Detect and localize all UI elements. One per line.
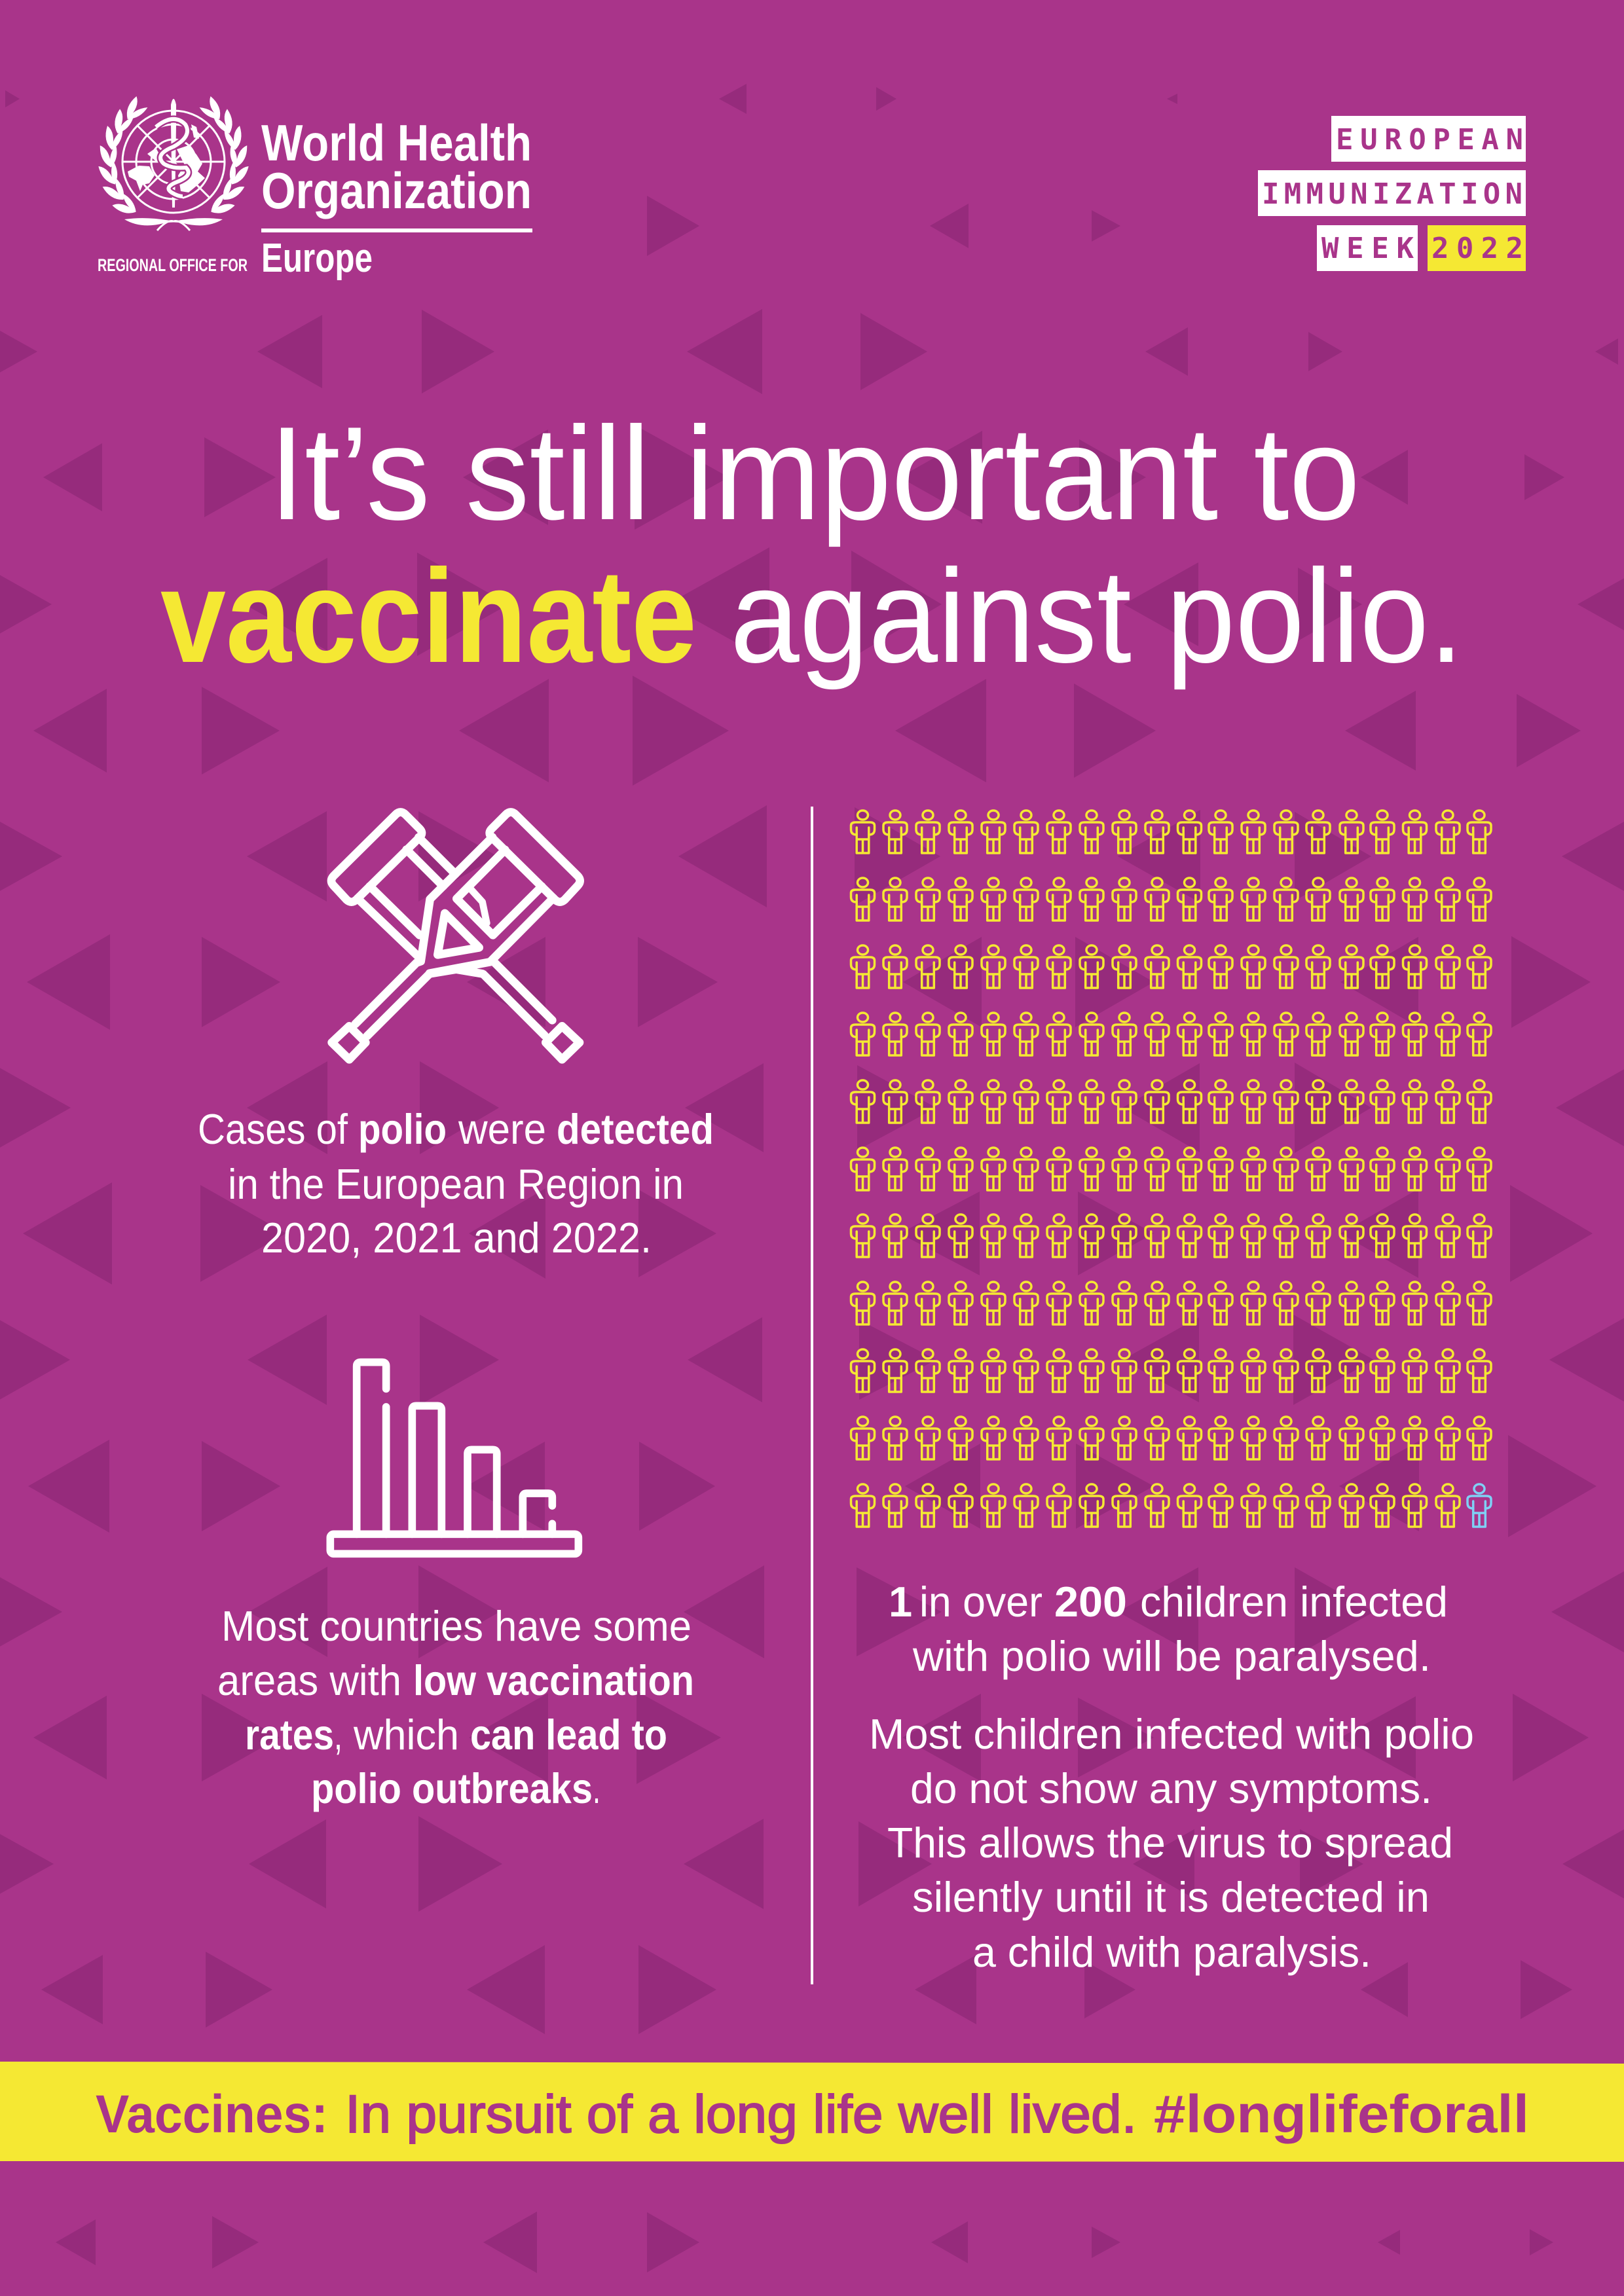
yellow banner: #longlifeforall [1154,2085,1529,2144]
logo wordmark: World Health Organization [261,114,532,219]
text: silent spread of the virus [869,1710,1474,1976]
logo wordmark: World Health Organization: Organization [261,162,532,219]
text: polio cases detected: in the European Region in [228,1160,684,1208]
European Immunization Week 2022 badge: EUROPEAN [1336,123,1523,156]
logo wordmark: World Health Organization: World Health [261,114,532,172]
text: 1 in over 200 children [889,1578,1448,1680]
text: 1 in over 200 children: 200 [1054,1578,1127,1626]
pictogram: 220 children, one paralysed [851,811,1491,1527]
WHO logo [98,96,532,281]
text: 1 in over 200 children: 1 [889,1578,912,1626]
text: polio cases detected: detected [557,1105,714,1153]
text: low vaccination rates: polio outbreaks [311,1764,593,1812]
text: polio cases detected: were [458,1105,546,1153]
title: against polio. [730,542,1464,691]
text: low vaccination rates: Most countries have some [221,1602,692,1650]
European Immunization Week 2022 badge: 2022 [1431,232,1523,265]
text: silent spread of the virus: a child with paralysis. [972,1928,1371,1976]
European Immunization Week 2022 badge: IMMUNIZATION [1262,177,1522,211]
text: silent spread of the virus: This allows the virus to spread [887,1819,1453,1867]
logo sub-line: Regional Office for Europe: Europe [261,236,373,281]
text: low vaccination rates: areas with [217,1656,401,1704]
text: low vaccination rates: low vaccination [413,1656,694,1704]
title: vaccinate [160,542,697,691]
title: It’s still important to [269,399,1360,548]
icon: declining bar chart [330,1362,578,1554]
text: low vaccination rates: . [593,1764,600,1812]
text: polio cases detected: Cases of [198,1105,348,1153]
text: low vaccination rates: , [334,1711,342,1758]
logo sub-line: Regional Office for Europe [98,236,373,281]
text: polio cases detected [198,1105,714,1262]
yellow banner: Vaccines: [96,2085,328,2144]
logo sub-line: Regional Office for Europe: REGIONAL OFFICE FOR [98,255,248,275]
text: 1 in over 200 children: with polio will be paralysed. [912,1632,1431,1680]
yellow banner: In pursuit of a long life well lived. [345,2085,1137,2144]
yellow banner [0,2062,1624,2162]
text: silent spread of the virus: silently until it is detected in [912,1873,1430,1921]
text: polio cases detected: polio [358,1105,447,1153]
icon: crossed crutches [331,812,580,1059]
European Immunization Week 2022 badge [1258,116,1526,271]
text: polio cases detected: 2020, 2021 and 2022. [261,1214,652,1262]
text: 1 in over 200 children: children infected [1140,1578,1448,1626]
icon: WHO emblem [98,96,249,230]
text: silent spread of the virus: do not show any symptoms. [910,1764,1432,1812]
title [160,399,1464,691]
text: low vaccination rates [217,1602,694,1812]
text: low vaccination rates: can lead to [470,1711,667,1758]
text: low vaccination rates: which [353,1711,459,1758]
text: low vaccination rates: rates [245,1711,334,1758]
European Immunization Week 2022 badge: WEEK [1321,232,1414,265]
text: silent spread of the virus: Most children infected with polio [869,1710,1474,1758]
text: 1 in over 200 children: in over [919,1578,1043,1626]
